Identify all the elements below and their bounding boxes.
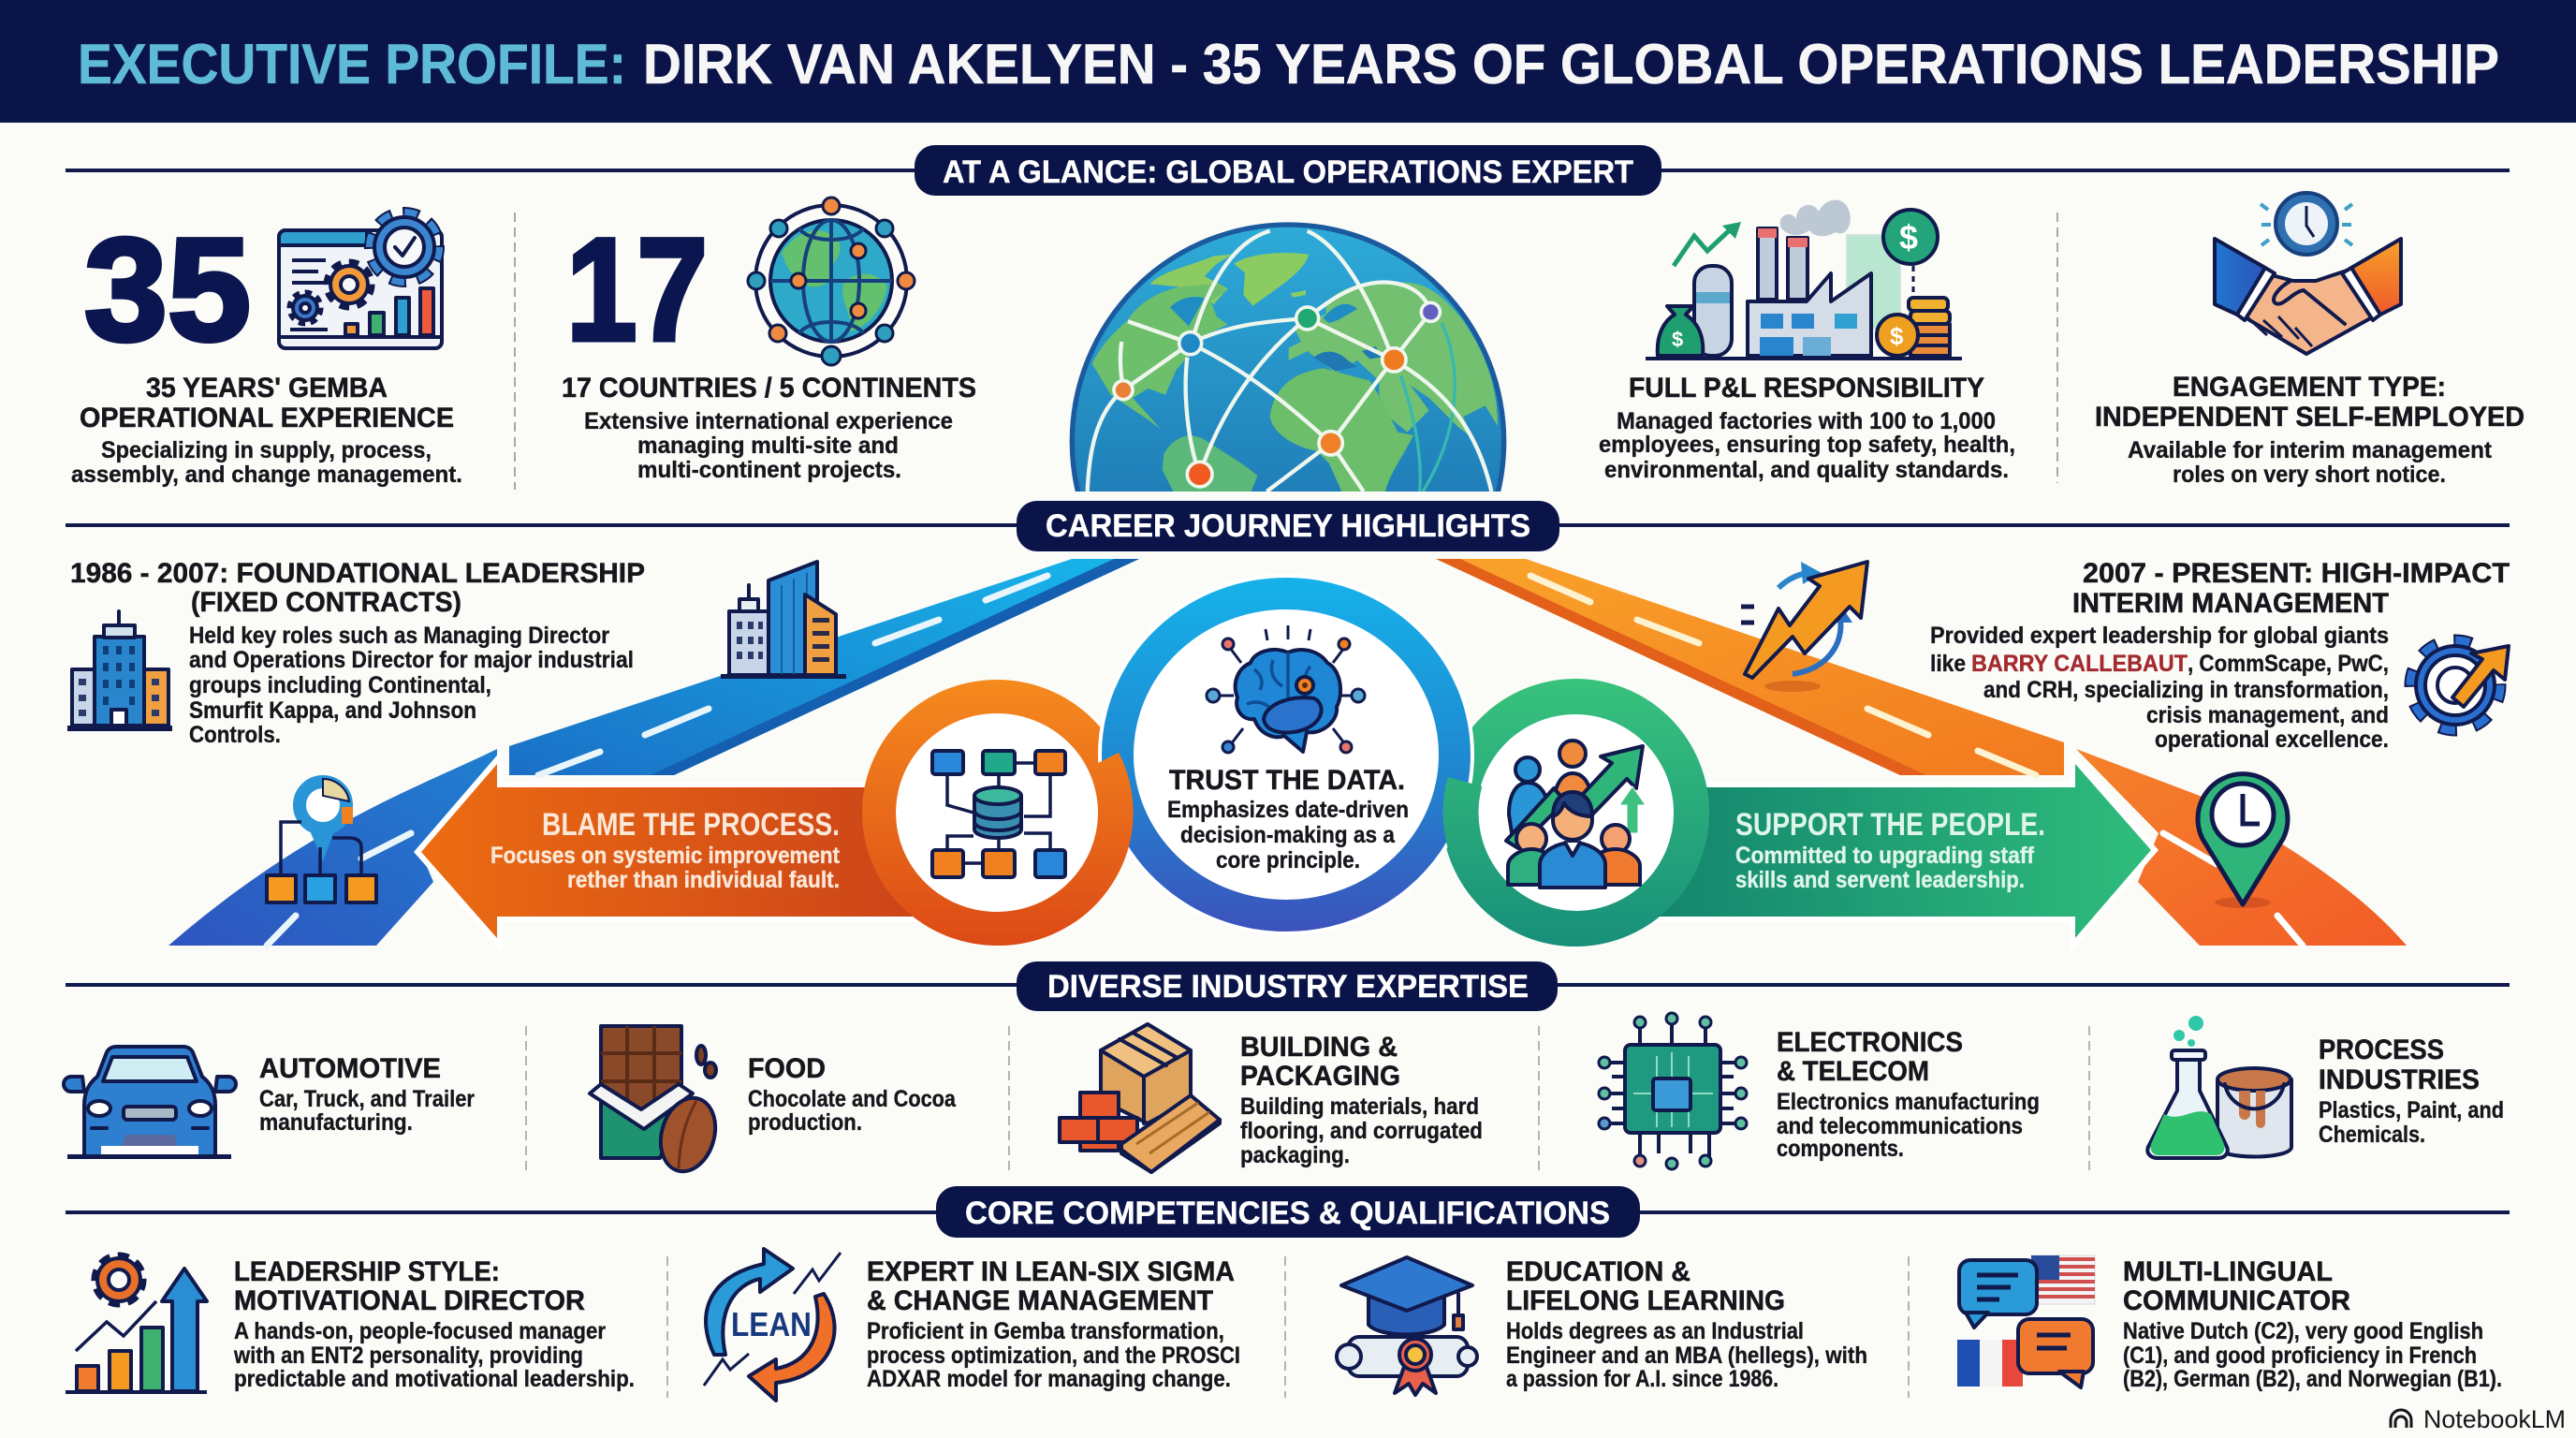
center text: trust the data: core principle. [1216,847,1360,873]
section header: core competencies [66,1186,2510,1238]
label text: Engineer and an MBA (hellegs), with [1506,1343,1867,1369]
heading [2072,558,2510,619]
description: Provided expert leadership for global giants [1930,623,2389,649]
description: crisis management, and [2146,702,2389,728]
label text: a passion for A.I. since 1986. [1506,1366,1778,1392]
description: Specializing in supply, process, [101,437,432,463]
heading: (FIXED CONTRACTS) [191,587,461,618]
description [1599,408,2015,483]
description: managing multi-site and [637,433,899,459]
number 35: 35 [84,209,251,372]
description: Available for interim management [2128,437,2493,463]
label text: packaging. [1240,1142,1350,1168]
icon: office buildings [67,611,172,731]
icon: factory and money: $ [1890,322,1904,350]
label text: MOTIVATIONAL DIRECTOR [234,1285,585,1316]
label text: LIFELONG LEARNING [1506,1285,1785,1316]
label text: FOOD [748,1053,826,1084]
label text: Plastics, Paint, and [2319,1097,2504,1123]
section header: career journey: CAREER JOURNEY HIGHLIGHTS [1046,508,1530,544]
icon: process flow diagram [932,751,1065,877]
description: multi-continent projects. [637,457,901,483]
label text [867,1256,1240,1392]
icon: small globe [748,198,915,365]
center text: trust the data [1167,765,1409,873]
label text [233,1256,635,1392]
description [189,623,634,748]
description [584,408,953,483]
label text: Car, Truck, and Trailer [259,1086,475,1112]
description: roles on very short notice. [2173,462,2446,488]
label text: predictable and motivational leadership. [234,1366,635,1392]
arrow: blame the process [417,756,973,946]
label text: Building materials, hard [1240,1093,1479,1120]
center text: trust the data: TRUST THE DATA. [1169,765,1405,796]
icon: team with growth arrow [1506,741,1646,888]
label text: EXPERT IN LEAN-SIX SIGMA [867,1256,1235,1287]
label text: Proficient in Gemba transformation, [867,1318,1224,1344]
competency: leadership style [66,1256,635,1394]
icon: target gear with arrow [2411,641,2509,729]
icon: factory and money: $ [1899,218,1918,257]
icon: rising zigzag arrow [1741,562,1867,692]
arrow text: Focuses on systemic improvement [490,843,841,869]
description: Extensive international experience [584,408,953,434]
title: DIRK VAN AKELYEN - 35 YEARS OF GLOBAL OPERATIONS LEADERSHIP [643,33,2499,95]
description: Held key roles such as Managing Director [189,623,609,649]
arrow text: rether than individual fault. [567,867,840,893]
icon: factory and money [1646,200,1962,360]
heading [2095,372,2525,433]
label text: manufacturing. [259,1109,413,1136]
icon: factory and money: $ [1672,328,1683,351]
label text [2123,1256,2502,1392]
arrow text [490,807,841,893]
career road: blue path [168,559,1139,946]
stat: 17 countries [562,198,976,483]
description [2128,437,2493,488]
arrow text: Committed to upgrading staff [1735,843,2035,869]
stat: engagement type [2095,193,2525,488]
label text: with an ENT2 personality, providing [233,1343,583,1369]
description: and CRH, specializing in transformation, [1983,677,2389,703]
notebooklm badge: NotebookLM [2423,1405,2566,1433]
label text: & TELECOM [1777,1056,1929,1087]
arrow text: BLAME THE PROCESS. [542,807,840,843]
description: employees, ensuring top safety, health, [1599,432,2015,458]
description: Managed factories with 100 to 1,000 [1617,408,1996,434]
icon: car [64,1047,236,1159]
label text [748,1053,957,1136]
industry: building and packaging [1060,1024,1483,1172]
icon: org chart pin on road [267,779,376,902]
icon: gears dashboard [279,213,442,348]
icon: city buildings on road [721,562,846,679]
industry: electronics and telecom [1599,1013,2040,1169]
label text: ELECTRONICS [1777,1027,1963,1058]
description: and Operations Director for major industrial [189,647,634,673]
icon: box, bricks, wood [1060,1024,1220,1172]
label text: process optimization, and the PROSCI [867,1343,1240,1369]
section header: core competencies: CORE COMPETENCIES & QUALIFICATIONS [965,1196,1610,1231]
label text [1777,1027,2040,1162]
label text: MULTI-LINGUAL [2123,1256,2333,1287]
competency: lean six sigma [704,1249,1240,1401]
description: like [1930,651,1966,677]
label text [2319,1034,2504,1148]
heading: 1986 - 2007: FOUNDATIONAL LEADERSHIP [70,558,645,589]
section header: industry expertise: DIVERSE INDUSTRY EXPERTISE [1047,969,1529,1005]
section header: career journey [66,501,2510,551]
description: Controls. [189,722,281,748]
icon: lean cycle: LEAN [731,1305,812,1343]
description: groups including Continental, [189,672,491,698]
competency: multi-lingual [1957,1255,2502,1392]
label text: ADXAR model for managing change. [867,1366,1231,1392]
icon: gear and growth chart [66,1257,207,1394]
label text: INDUSTRIES [2319,1064,2480,1095]
industry: food [590,1026,957,1178]
arrow text: skills and servent leadership. [1735,867,2025,893]
label text: Native Dutch (C2), very good English [2123,1318,2483,1344]
label text: (C1), and good proficiency in French [2123,1343,2477,1369]
section header: at a glance: AT A GLANCE: GLOBAL OPERATIONS EXPERT [943,154,1633,190]
heading: 35 YEARS' GEMBA [146,373,388,404]
competency: education [1337,1256,1867,1395]
icon: circuit chip [1599,1013,1747,1169]
description [71,437,462,488]
career text: interim management [1930,558,2510,753]
arrow text: SUPPORT THE PEOPLE. [1735,807,2045,843]
heading [80,373,454,433]
description: BARRY CALLEBAUT [1971,651,2188,677]
title: EXECUTIVE PROFILE: [78,33,626,95]
label text: Electronics manufacturing [1777,1089,2040,1115]
heading: FULL P&L RESPONSIBILITY [1629,373,1984,404]
label text: components. [1777,1136,1904,1162]
label text: Chemicals. [2319,1122,2425,1148]
label text [259,1053,475,1136]
label text: flooring, and corrugated [1240,1118,1483,1144]
heading: 17 COUNTRIES / 5 CONTINENTS [562,373,976,404]
description: operational excellence. [2155,726,2389,753]
label text: EDUCATION & [1506,1256,1690,1287]
icon: brain with nodes [1207,625,1365,753]
section header: at a glance [66,145,2510,196]
icon: chocolate and cocoa [590,1026,724,1178]
heading [70,558,645,618]
icon: handshake and clock [2215,193,2401,354]
industry: automotive [64,1047,475,1159]
center text: trust the data: decision-making as a [1180,822,1396,848]
label text: AUTOMOTIVE [259,1053,441,1084]
description: assembly, and change management. [71,462,462,488]
arrow: support the people [1610,756,2155,946]
career text: foundational leadership [67,558,645,748]
interlocked rings [879,594,1691,929]
description: , CommScape, PwC, [2188,651,2389,677]
number 17: 17 [566,209,708,372]
label text: production. [748,1109,862,1136]
label text: COMMUNICATOR [2123,1285,2350,1316]
label text [1506,1256,1867,1392]
career road: orange path [1436,559,2407,946]
label text: & CHANGE MANAGEMENT [867,1285,1213,1316]
icon: graduation cap and diploma [1337,1257,1477,1395]
description [1930,623,2389,753]
heading: ENGAGEMENT TYPE: [2173,372,2446,403]
icon: lean cycle [704,1249,841,1401]
icon: speech bubbles and flags [1957,1255,2095,1387]
heading: INDEPENDENT SELF-EMPLOYED [2095,402,2525,433]
label text: Holds degrees as an Industrial [1506,1318,1804,1344]
label text: PROCESS [2319,1034,2444,1065]
label text: LEADERSHIP STYLE: [234,1256,500,1287]
industry: process industries [2147,1016,2504,1158]
label text: (B2), German (B2), and Norwegian (B1). [2123,1366,2502,1392]
label text: Chocolate and Cocoa [748,1086,957,1112]
label text: BUILDING & [1240,1032,1398,1063]
label text [1240,1032,1483,1168]
label text: and telecommunications [1777,1113,2023,1139]
stat: 35 years [71,209,462,488]
central globe [1069,222,1507,492]
arrow text [1735,807,2045,893]
section header: industry expertise [66,961,2510,1011]
header banner [0,0,2576,123]
description: environmental, and quality standards. [1604,457,2009,483]
icon: map pin with clock [2198,774,2288,908]
center text: trust the data: Emphasizes date-driven [1167,797,1409,823]
label text: A hands-on, people-focused manager [234,1318,606,1344]
heading: 2007 - PRESENT: HIGH-IMPACT [2083,558,2510,589]
heading: OPERATIONAL EXPERIENCE [80,403,454,433]
label text: PACKAGING [1240,1061,1400,1092]
stat: P&L responsibility [1599,200,2015,483]
heading: INTERIM MANAGEMENT [2072,588,2389,619]
description: Smurfit Kappa, and Johnson [189,697,476,724]
icon: flask and paint can [2147,1016,2291,1158]
